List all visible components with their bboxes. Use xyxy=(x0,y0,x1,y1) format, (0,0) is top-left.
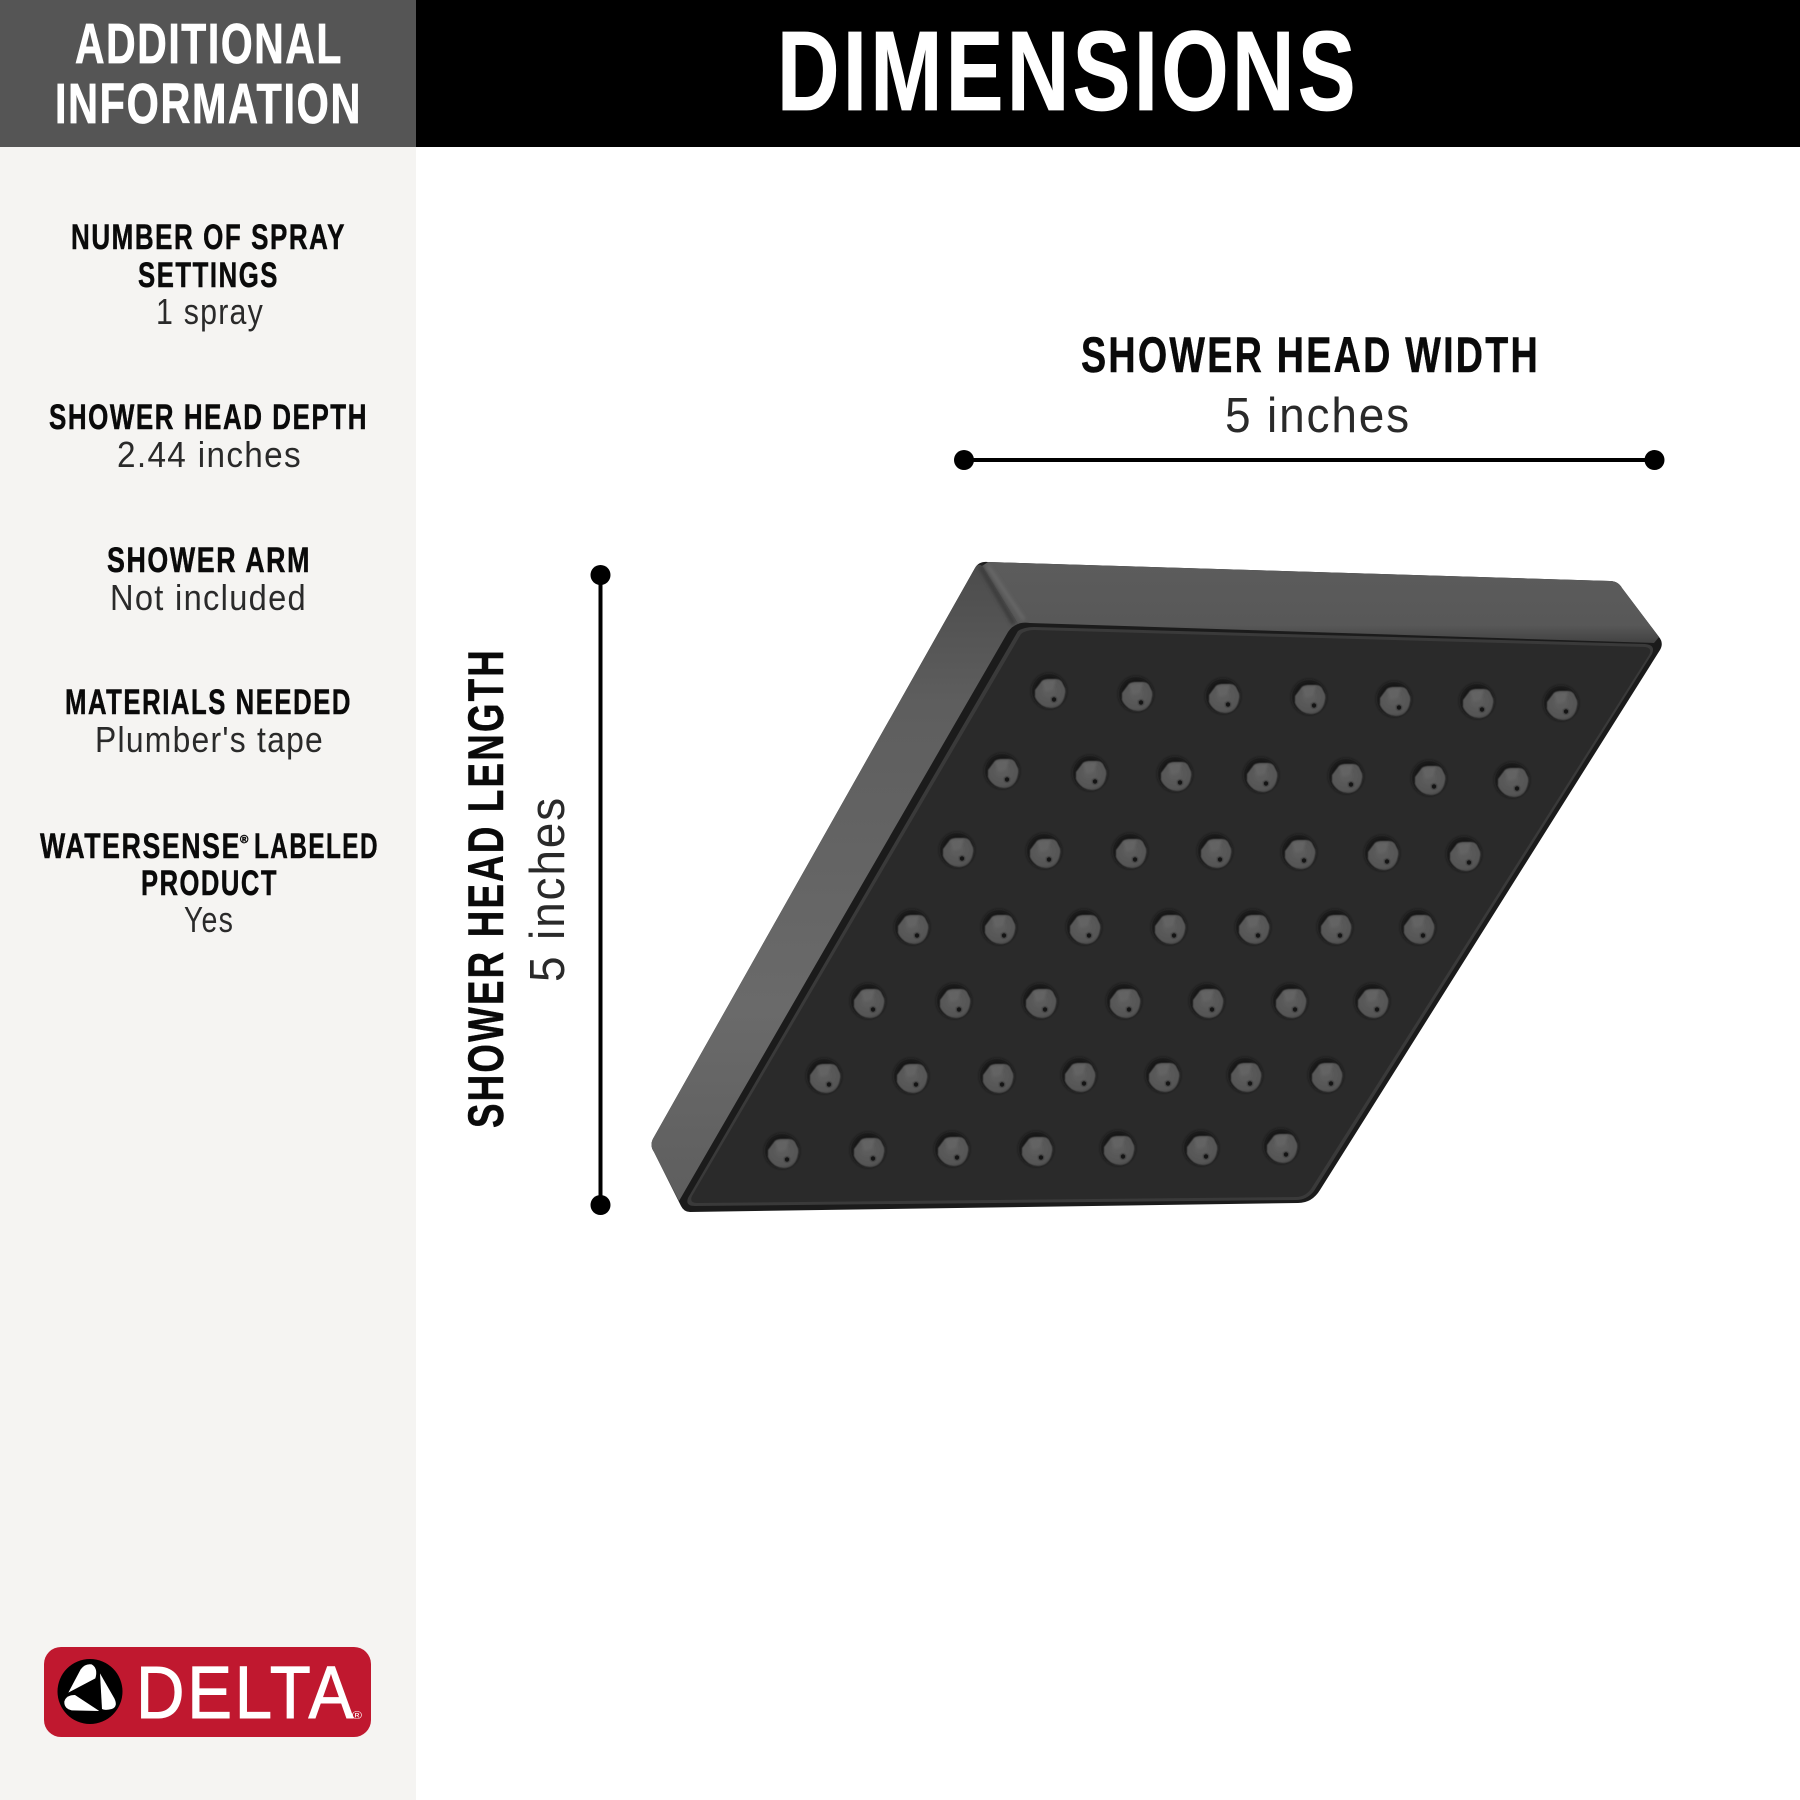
spray nozzles xyxy=(765,674,1578,1168)
width dimension xyxy=(954,327,1664,470)
spec: shower head depth: 2.44 inches xyxy=(117,434,302,475)
spec: watersense labeled product: LABELED xyxy=(254,827,379,866)
spec: watersense labeled product: ® xyxy=(240,834,249,846)
face plate rim xyxy=(687,627,1653,1206)
panel: additional information sidebar xyxy=(0,0,416,1800)
title banner: DIMENSIONS xyxy=(777,8,1359,134)
width dimension: SHOWER HEAD WIDTH xyxy=(1081,327,1540,383)
corner mitre shading xyxy=(980,566,1024,624)
spec: shower head depth: SHOWER HEAD DEPTH xyxy=(49,398,368,437)
spec: number of spray settings xyxy=(71,218,346,332)
delta logo xyxy=(44,1647,371,1737)
delta logo: ® xyxy=(352,1710,362,1722)
sidebar header xyxy=(0,0,416,147)
spec: shower head depth xyxy=(49,398,368,475)
delta logo: DELTA xyxy=(136,1651,356,1734)
length dimension: SHOWER HEAD LENGTH xyxy=(458,648,514,1128)
sidebar header: INFORMATION xyxy=(55,72,362,136)
sidebar background xyxy=(0,147,416,1800)
spec: watersense labeled product xyxy=(40,827,379,940)
left edge face xyxy=(652,565,1018,1201)
spec: materials needed: Plumber's tape xyxy=(95,719,324,760)
head silhouette xyxy=(652,562,1662,1212)
top edge face xyxy=(982,562,1659,643)
shower head illustration xyxy=(652,562,1662,1212)
spec: shower arm xyxy=(107,541,311,618)
length dimension xyxy=(458,565,610,1215)
spec: watersense labeled product: PRODUCT xyxy=(141,864,278,903)
width dimension: 5 inches xyxy=(1225,389,1411,443)
spec: watersense labeled product: WATERSENSE xyxy=(40,827,241,866)
spec: materials needed: MATERIALS NEEDED xyxy=(65,683,352,722)
spec: number of spray settings: 1 spray xyxy=(156,291,264,332)
spec: shower arm: Not included xyxy=(110,577,307,618)
title banner xyxy=(416,0,1800,147)
spec: watersense labeled product: Yes xyxy=(184,899,234,940)
spec: materials needed xyxy=(65,683,352,760)
spec: shower arm: SHOWER ARM xyxy=(107,541,311,580)
length dimension: 5 inches xyxy=(521,796,575,982)
spec: number of spray settings: NUMBER OF SPRAY xyxy=(71,218,346,257)
sidebar header: ADDITIONAL xyxy=(75,12,343,76)
spec: number of spray settings: SETTINGS xyxy=(138,256,279,295)
face plate xyxy=(691,630,1650,1203)
